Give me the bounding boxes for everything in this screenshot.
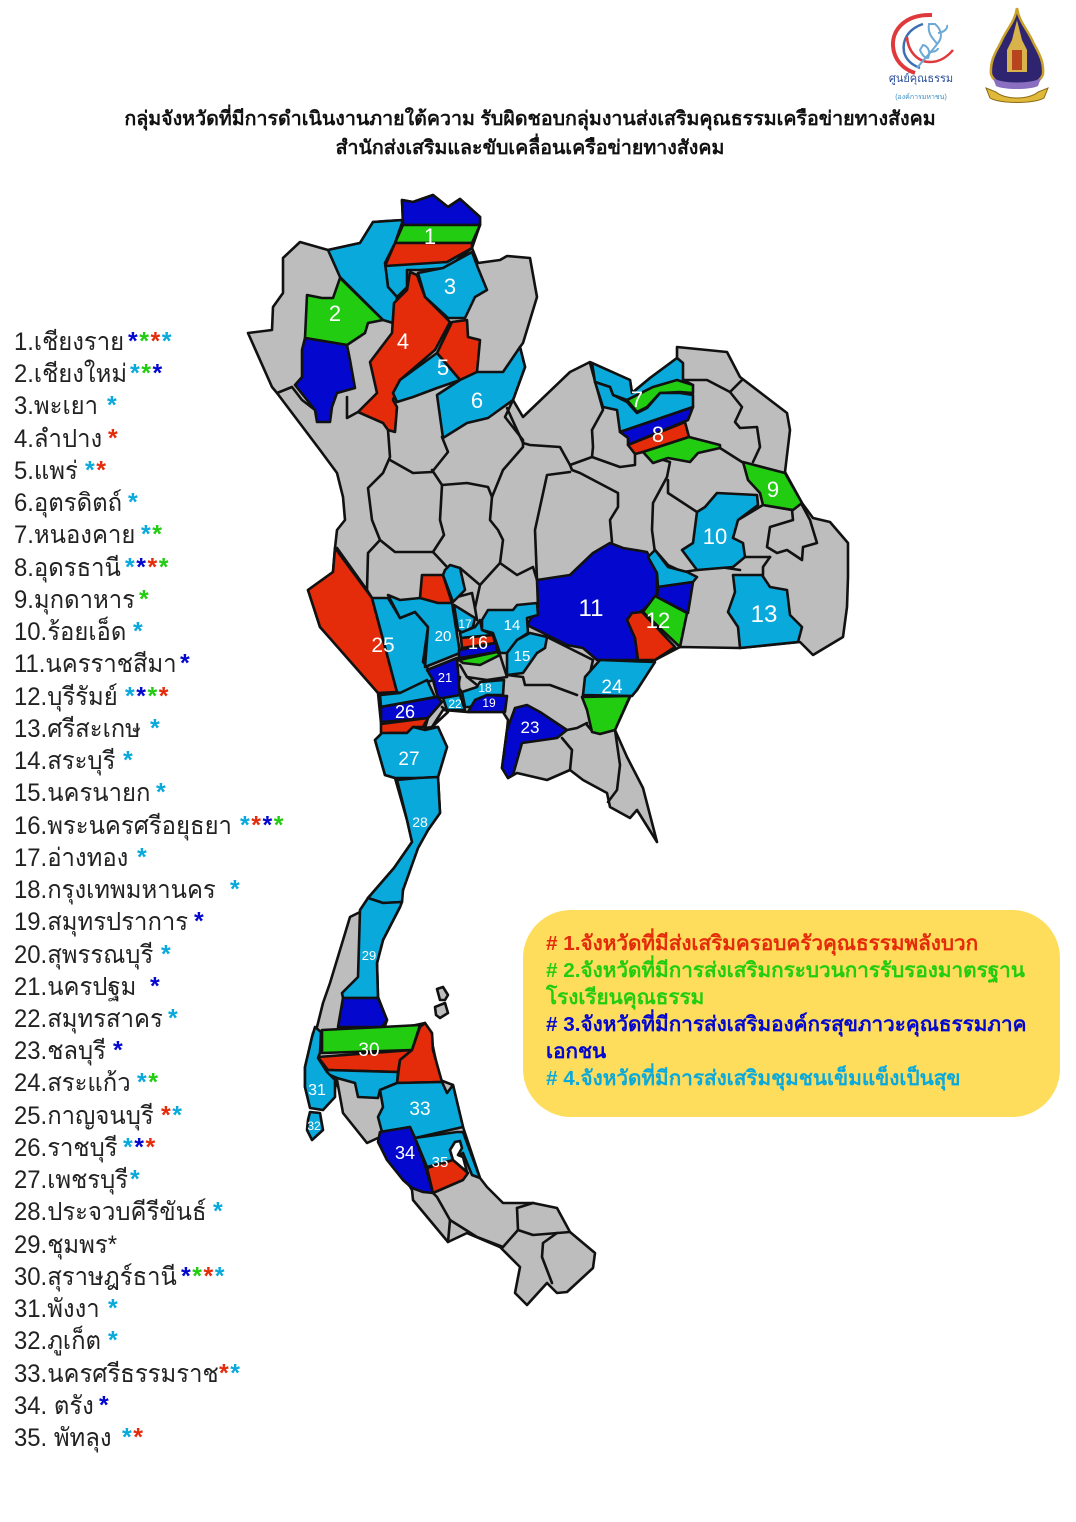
item 8: **** bbox=[125, 554, 170, 582]
item 34: 34. ตรัง bbox=[14, 1392, 94, 1420]
item 10: 10.ร้อยเอ็ด bbox=[14, 618, 126, 646]
item 33: ** bbox=[219, 1360, 241, 1388]
item 24: ** bbox=[137, 1068, 159, 1096]
logo: moral center bbox=[889, 13, 954, 101]
extra cyan province bbox=[443, 565, 465, 602]
province numbers: 9 bbox=[767, 477, 779, 502]
province 2: Chiang Mai bbox=[295, 220, 403, 422]
item 21: 21.นครปฐม bbox=[14, 973, 136, 1001]
logo: royal seal bbox=[985, 8, 1049, 103]
province 6: Uttaradit bbox=[437, 347, 525, 438]
province 9: Mukdahan bbox=[743, 462, 802, 510]
province 15: Nakhon Nayok bbox=[507, 633, 547, 675]
item 1 bbox=[14, 328, 173, 356]
logo: moral center: (องค์การมหาชน) bbox=[895, 93, 947, 101]
item 20: * bbox=[161, 940, 172, 968]
extra red province bbox=[420, 575, 452, 603]
item 4: 4.ลำปาง bbox=[14, 425, 102, 453]
legend item 1: # 1.จังหวัดที่มีส่งเสริมครอบครัวคุณธรรมพลังบวก bbox=[546, 932, 978, 955]
item 14: 14.สระบุรี bbox=[14, 747, 115, 775]
item 23: * bbox=[113, 1036, 124, 1064]
province 4: Lampang bbox=[358, 272, 450, 432]
item 31: * bbox=[108, 1294, 119, 1322]
item 11: * bbox=[180, 650, 191, 678]
title: กลุ่มจังหวัดที่มีการดำเนินงานภายใต้ความ รับผิดชอบกลุ่มงานส่งเสริมคุณธรรมเครือข่ายทางสังคม bbox=[124, 108, 936, 130]
province 24: Sa Kaeo bbox=[582, 660, 655, 734]
item 17: * bbox=[137, 844, 148, 872]
province 20: Suphan Buri bbox=[388, 595, 460, 667]
item 3: 3.พะเยา bbox=[14, 392, 98, 420]
province 21: Nakhon Pathom bbox=[427, 658, 460, 698]
province numbers: 29 bbox=[362, 948, 376, 963]
province 1: Chiang Rai bbox=[385, 195, 480, 297]
item 21: * bbox=[150, 972, 161, 1000]
province numbers: 25 bbox=[371, 634, 395, 657]
item 1: **** bbox=[128, 328, 173, 356]
item 31: 31.พังงา bbox=[14, 1295, 100, 1323]
legend item 2: # 2.จังหวัดที่มีการส่งเสริมกระบวนการรับรองมาตรฐาน bbox=[546, 959, 1025, 982]
province 14: Saraburi bbox=[482, 603, 538, 653]
province 32: Phuket bbox=[307, 1112, 323, 1140]
title bbox=[124, 104, 936, 159]
item 34: * bbox=[99, 1392, 110, 1420]
item 28: 28.ประจวบคีรีขันธ์ bbox=[14, 1198, 207, 1226]
gray base country bbox=[248, 195, 848, 1305]
province 5: Phrae bbox=[393, 320, 480, 402]
province 23: Chonburi bbox=[502, 705, 567, 778]
province numbers: 8 bbox=[652, 422, 664, 447]
item 18: 18.กรุงเทพมหานคร bbox=[14, 876, 216, 904]
item 20: 20.สุพรรณบุรี bbox=[14, 941, 153, 969]
province 31: Phang Nga bbox=[305, 1027, 335, 1110]
item 7: 7.หนองคาย bbox=[14, 521, 135, 549]
item 35: ** bbox=[122, 1424, 144, 1452]
item 18: * bbox=[230, 876, 241, 904]
item 12: **** bbox=[125, 682, 170, 710]
item 12 bbox=[14, 682, 170, 712]
title: สำนักส่งเสริมและขับเคลื่อนเครือข่ายทางสังคม bbox=[336, 137, 724, 159]
legend box: เอกชน bbox=[546, 1040, 606, 1063]
province numbers: 3 bbox=[444, 274, 456, 299]
province numbers: 4 bbox=[397, 329, 409, 354]
item 13: * bbox=[150, 714, 161, 742]
province numbers: 18 bbox=[478, 681, 492, 695]
item 15: 15.นครนายก bbox=[14, 779, 150, 807]
province 17: Ang Thong bbox=[454, 605, 475, 633]
province numbers: 32 bbox=[307, 1119, 321, 1133]
province numbers: 33 bbox=[409, 1099, 431, 1120]
item 5: 5.แพร่ bbox=[14, 457, 78, 485]
item 32: * bbox=[108, 1326, 119, 1354]
item 9: 9.มุกดาหาร bbox=[14, 586, 135, 614]
item 24: 24.สระแก้ว bbox=[14, 1069, 131, 1097]
logo: moral center: ศูนย์คุณธรรม bbox=[889, 72, 953, 85]
province numbers: 1 bbox=[424, 224, 436, 249]
legend item 3: # 3.จังหวัดที่มีการส่งเสริมองค์กรสุขภาวะคุณธรรมภาค bbox=[546, 1013, 1026, 1036]
item 3: * bbox=[107, 392, 118, 420]
item 12: 12.บุรีรัมย์ bbox=[14, 683, 118, 711]
province numbers: 28 bbox=[412, 814, 428, 830]
province 26: Ratchaburi bbox=[380, 680, 442, 738]
province 28: Prachuap Khiri Khan bbox=[368, 777, 440, 903]
item 1: 1.เชียงราย bbox=[14, 328, 124, 356]
item 30: **** bbox=[181, 1262, 226, 1290]
province 30: Surat Thani bbox=[318, 998, 442, 1098]
item 16: 16.พระนครศรีอยุธยา bbox=[14, 812, 232, 840]
province 3: Phayao bbox=[418, 252, 487, 318]
province numbers: 21 bbox=[438, 670, 452, 685]
province 8: Udon Thani bbox=[595, 382, 720, 463]
province numbers: 2 bbox=[329, 301, 341, 326]
province numbers: 7 bbox=[631, 387, 643, 412]
Songkhla lake bbox=[450, 1141, 467, 1172]
province 29: Chumphon bbox=[342, 898, 402, 998]
province 22: Samut Sakhon bbox=[443, 695, 465, 710]
item 23: 23.ชลบุรี bbox=[14, 1037, 106, 1065]
province numbers bbox=[307, 224, 779, 1171]
province numbers: 30 bbox=[358, 1040, 380, 1061]
item 4: * bbox=[108, 424, 119, 452]
item 22: * bbox=[168, 1004, 179, 1032]
province numbers: 5 bbox=[437, 355, 449, 380]
province numbers: 22 bbox=[448, 697, 462, 711]
item 7: ** bbox=[141, 520, 163, 548]
item 5 bbox=[14, 456, 107, 485]
province numbers: 6 bbox=[471, 388, 483, 413]
item 13: 13.ศรีสะเกษ bbox=[14, 715, 141, 743]
province 18: Bangkok bbox=[462, 680, 504, 707]
item 14: * bbox=[123, 746, 134, 774]
province numbers: 34 bbox=[395, 1143, 415, 1163]
province 19: Samut Prakan bbox=[468, 695, 507, 712]
item 29: 29.ชุมพร* bbox=[14, 1231, 117, 1259]
item 19: 19.สมุทรปราการ bbox=[14, 908, 188, 936]
item 8 bbox=[14, 554, 170, 582]
province 35: Phatthalung bbox=[415, 1132, 480, 1193]
province 7: Nong Khai bbox=[592, 358, 693, 412]
item 35: 35. พัทลุง bbox=[14, 1424, 112, 1452]
item 5: ** bbox=[85, 456, 107, 484]
province 33: Nakhon Si Thammarat bbox=[378, 1082, 463, 1138]
legend item 4: # 4.จังหวัดที่มีการส่งเสริมชุมชนเข็มแข็งเป็นสุข bbox=[546, 1067, 961, 1090]
item 27: * bbox=[130, 1166, 141, 1194]
province list bbox=[14, 328, 285, 1452]
province numbers: 24 bbox=[601, 677, 623, 698]
item 26: 26.ราชบุรี bbox=[14, 1134, 118, 1162]
item 6: 6.อุตรดิตถ์ bbox=[14, 489, 122, 517]
item 25: 25.กาญจนบุรี bbox=[14, 1102, 154, 1130]
item 22: 22.สมุทรสาคร bbox=[14, 1005, 163, 1033]
item 15: * bbox=[156, 778, 167, 806]
item 26: *** bbox=[123, 1134, 157, 1162]
province 34: Trang bbox=[378, 1127, 433, 1193]
item 19: * bbox=[194, 908, 205, 936]
item 8: 8.อุดรธานี bbox=[14, 554, 121, 582]
province numbers: 19 bbox=[482, 696, 496, 710]
legend item 2 bbox=[546, 955, 1025, 1010]
province 10: Roi Et bbox=[682, 493, 758, 570]
item 10: * bbox=[133, 618, 144, 646]
province 27: Phetchaburi bbox=[375, 727, 447, 778]
province numbers: 31 bbox=[308, 1082, 326, 1099]
province numbers: 14 bbox=[504, 617, 520, 634]
legend box: โรงเรียนคุณธรรม bbox=[546, 986, 704, 1009]
item 16: **** bbox=[240, 812, 285, 840]
item 32: 32.ภูเก็ต bbox=[14, 1327, 101, 1355]
province numbers: 23 bbox=[521, 718, 539, 737]
item 11: 11.นครราชสีมา bbox=[14, 650, 177, 678]
province 13: Sisaket bbox=[728, 575, 802, 648]
province numbers: 15 bbox=[514, 648, 530, 665]
province numbers: 35 bbox=[432, 1154, 448, 1171]
province numbers: 13 bbox=[751, 601, 777, 628]
province 11: Nakhon Ratchasima bbox=[527, 543, 657, 660]
item 2: 2.เชียงใหม่ bbox=[14, 360, 127, 388]
item 33: 33.นครศรีธรรมราช bbox=[14, 1360, 219, 1388]
province numbers: 11 bbox=[579, 595, 603, 622]
item 25: ** bbox=[161, 1102, 183, 1130]
item 6: * bbox=[128, 488, 139, 516]
province numbers: 12 bbox=[646, 608, 670, 633]
item 2: *** bbox=[130, 360, 164, 388]
province 25: Kanchanaburi bbox=[308, 548, 433, 693]
legend box bbox=[523, 910, 1060, 1117]
province numbers: 20 bbox=[435, 628, 451, 645]
item 17: 17.อ่างทอง bbox=[14, 844, 128, 872]
province borders bbox=[277, 363, 817, 1283]
province 12: Buriram bbox=[627, 550, 697, 660]
province numbers: 17 bbox=[458, 617, 472, 631]
item 9: * bbox=[139, 586, 150, 614]
item 27: 27.เพชรบุรี bbox=[14, 1166, 128, 1194]
item 30: 30.สุราษฎร์ธานี bbox=[14, 1263, 177, 1291]
province numbers: 27 bbox=[398, 749, 420, 770]
province 16: Ayutthaya bbox=[459, 620, 500, 665]
province numbers: 10 bbox=[703, 524, 727, 549]
item 28: * bbox=[213, 1198, 224, 1226]
province numbers: 16 bbox=[468, 633, 488, 653]
province numbers: 26 bbox=[395, 702, 415, 722]
